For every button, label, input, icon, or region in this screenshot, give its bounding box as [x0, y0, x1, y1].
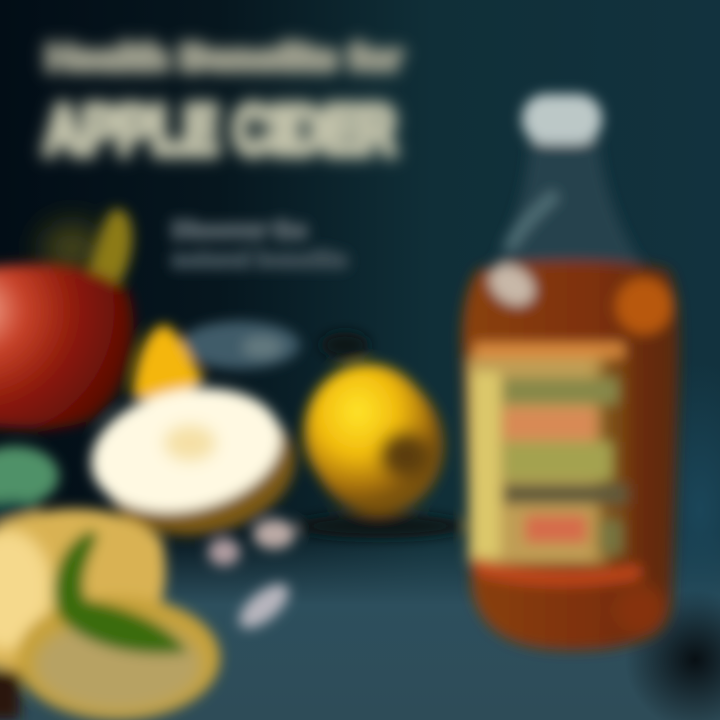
label bottom band: [472, 557, 640, 585]
apple slice: [80, 371, 306, 550]
seeds: [208, 519, 296, 636]
label fade to liquid: [600, 360, 626, 560]
bottle glass neck: [492, 140, 645, 270]
small yellow fruit: [132, 325, 205, 399]
stem shadow: [42, 224, 102, 272]
subtitle line 1: Discover the: [172, 217, 307, 244]
label text band green: [503, 378, 618, 404]
label top band: [474, 343, 624, 359]
label paper: [468, 358, 608, 563]
bottle body: [462, 261, 679, 650]
subtitle: [172, 217, 347, 272]
slice core: [164, 425, 216, 461]
label green corner: [600, 520, 622, 554]
lemon: [295, 364, 465, 538]
bottle label: [468, 343, 640, 585]
slice flesh: [80, 371, 292, 529]
bottle: [462, 94, 679, 650]
apple body: [0, 264, 134, 429]
lemon shadow: [295, 514, 465, 538]
title line 1: Health Benefits for: [46, 37, 402, 78]
front slice flesh: [34, 619, 202, 711]
back slice light area: [0, 530, 52, 650]
neck highlight: [508, 194, 556, 248]
apple with stem: [0, 209, 134, 429]
corner shadow: [0, 670, 20, 720]
apple stem: [88, 209, 132, 285]
lemon dark spot: [381, 433, 429, 477]
seed 2: [253, 519, 295, 549]
label left strip: [472, 372, 500, 557]
green leaf left: [0, 446, 59, 524]
dark patch above lemon: [321, 332, 369, 358]
mint leaf: [54, 530, 188, 654]
bottle orange highlight: [616, 278, 672, 334]
lemon slices: [0, 509, 220, 720]
front slice rim: [16, 596, 220, 720]
subtitle line 2: natural benefits: [172, 247, 347, 272]
lemon body: [304, 364, 432, 500]
slice skin: [94, 386, 306, 550]
seed 3: [232, 576, 296, 636]
label text band red: [525, 515, 587, 543]
title: [44, 37, 402, 168]
bottle glare: [482, 256, 542, 314]
lemon lower rim: [312, 375, 444, 515]
title line 2: APPLE CIDER: [44, 92, 396, 168]
label text band orange: [503, 408, 596, 440]
label text band dark: [503, 484, 628, 504]
label text band yellow green: [503, 442, 612, 480]
lower bottle highlight: [614, 584, 666, 636]
seed 1: [208, 538, 240, 566]
blue background object: [180, 321, 300, 369]
back slice: [0, 509, 165, 672]
bottle cap: [522, 94, 602, 144]
